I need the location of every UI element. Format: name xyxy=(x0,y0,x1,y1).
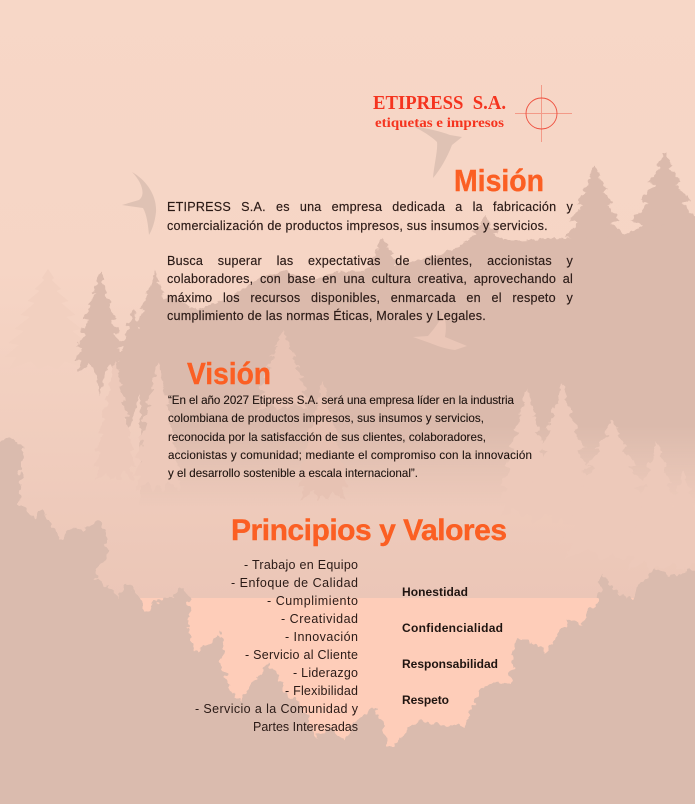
list: principles: - Innovación xyxy=(285,630,358,644)
front dark tree line xyxy=(0,439,695,804)
mission paragraph 1: comercialización de productos impresos, sus insumos y servicios. xyxy=(167,219,548,233)
water xyxy=(0,598,695,758)
mission paragraph 2: Busca superar las expectativas de clientes, accionistas y xyxy=(167,254,573,268)
list: values xyxy=(402,585,503,707)
list: principles: - Servicio al Cliente xyxy=(245,648,358,662)
vision statement: “En el año 2027 Etipress S.A. será una empresa líder en la industria xyxy=(168,394,515,407)
mission paragraph 2: cumplimiento de las normas Éticas, Morales y Legales. xyxy=(167,309,486,323)
vision statement: reconocida por la satisfacción de sus clientes, colaboradores, xyxy=(168,431,486,444)
vision statement: colombiana de productos impresos, sus insumos y servicios, xyxy=(168,412,484,425)
list: principles: - Servicio a la Comunidad y xyxy=(195,702,359,716)
list: principles: - Cumplimiento xyxy=(267,594,358,608)
mission paragraph 1 xyxy=(167,200,573,233)
list: principles: - Enfoque de Calidad xyxy=(231,576,358,590)
list: principles: - Flexibilidad xyxy=(285,684,358,698)
list: values: Responsabilidad xyxy=(402,657,498,671)
pale distant tree xyxy=(5,269,91,369)
rear dark tree line xyxy=(74,152,695,474)
list: values: Respeto xyxy=(402,693,449,707)
mission paragraph 2 xyxy=(167,254,573,323)
mission paragraph 2: colaboradores, con base en una cultura creativa, aprovechando al xyxy=(167,272,573,286)
logo: Etipress S.A. xyxy=(373,85,572,142)
list: principles: - Liderazgo xyxy=(293,666,358,680)
heading: Visión: Visión xyxy=(187,356,271,391)
bird: pale xyxy=(413,313,467,350)
heading: Misión: Misión xyxy=(454,163,544,198)
vision statement: y el desarrollo sostenible a escala internacional”. xyxy=(168,467,418,480)
bird: top xyxy=(413,126,462,178)
vision statement: accionistas y comunidad; mediante el compromiso con la innovación xyxy=(168,449,532,462)
logo tagline: etiquetas e impresos xyxy=(375,115,504,130)
bird: left xyxy=(122,172,156,235)
list: principles: - Creatividad xyxy=(281,612,358,626)
list: principles: Partes Interesadas xyxy=(253,720,358,734)
list: values: Confidencialidad xyxy=(402,621,503,635)
list: principles xyxy=(195,558,359,734)
list: values: Honestidad xyxy=(402,585,468,599)
heading: Principios y Valores: Principios y Valores xyxy=(231,514,507,547)
mission paragraph 1: ETIPRESS S.A. es una empresa dedicada a la fabricación y xyxy=(167,200,573,214)
logo wordmark: ETIPRESS S.A. xyxy=(373,92,506,114)
mission paragraph 2: máximo los recursos disponibles, enmarcada en el respeto y xyxy=(167,291,573,305)
light foreground trees xyxy=(93,330,695,571)
vision statement xyxy=(168,394,532,480)
logo crosshair icon xyxy=(515,85,572,142)
list: principles: - Trabajo en Equipo xyxy=(244,558,358,572)
